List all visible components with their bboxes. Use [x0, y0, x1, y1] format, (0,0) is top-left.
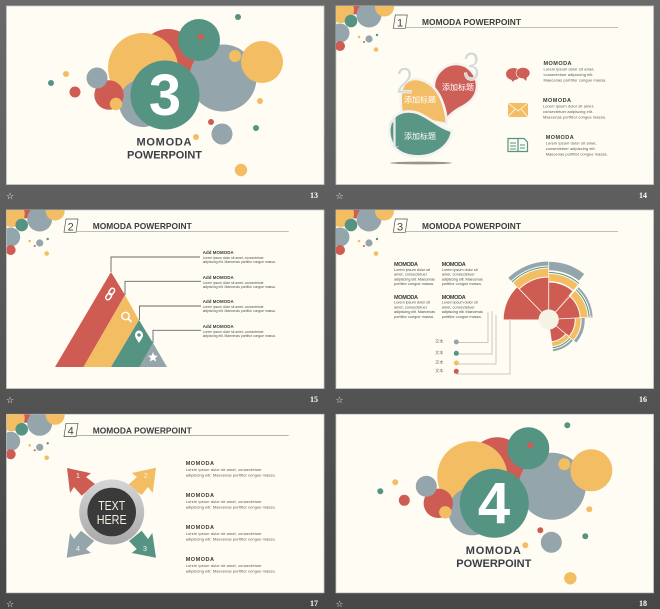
bubble cluster: [377, 422, 612, 584]
legend labels: 文本: [435, 338, 443, 344]
footer 15: 15: [310, 395, 318, 404]
heading: MOMODA POWERPOINT: [422, 221, 522, 231]
label 3: Lorem ipsum dolor sit amet, consectetuer: [203, 305, 265, 309]
legend dot red: [454, 369, 459, 374]
heading: 3: [397, 221, 403, 233]
icon: link: [105, 287, 116, 301]
arrow numbers: 2: [144, 471, 148, 480]
corner bubbles: [6, 414, 65, 460]
section title: POWERPOINT: [127, 150, 202, 162]
corner bubbles: [6, 210, 65, 256]
drop: yellow: [401, 79, 447, 124]
drop labels: 添加标题: [442, 82, 474, 92]
legend labels: 文本: [435, 358, 443, 364]
section title: POWERPOINT: [456, 558, 532, 570]
text block 3: Lorem ipsum dolor sit amet, consectetuer: [186, 531, 262, 536]
slide 16: radial chart: [336, 210, 654, 389]
text block 2: MOMODA: [543, 98, 571, 104]
text block 4: adipiscing elit. Maecenas porttitor congue massa.: [186, 569, 276, 574]
text block bottom right: adipiscing elit. Maecenas: [442, 309, 483, 314]
text block 4: MOMODA: [186, 557, 214, 563]
text block 4: Lorem ipsum dolor sit amet, consectetuer: [186, 563, 262, 568]
footer 17: 17: [310, 599, 318, 608]
text block top right: Lorem ipsum dolor sit: [442, 267, 479, 272]
numeral 2: 2: [396, 62, 413, 102]
text block 3: adipiscing elit. Maecenas porttitor congue massa.: [186, 537, 276, 542]
label 4: [203, 324, 276, 338]
pyramid chart: [55, 272, 167, 367]
icon: map pin: [135, 330, 143, 343]
label 1: Lorem ipsum dolor sit amet, consectetuer: [203, 256, 265, 260]
leader lines: [111, 257, 201, 343]
icon: envelope: [508, 103, 528, 117]
text block 3: Maecenas porttitor congue massa.: [546, 151, 608, 156]
text block bottom left: MOMODA: [394, 295, 418, 301]
drop: red: [434, 64, 477, 122]
text block 4: [186, 557, 276, 574]
slide 14: teardrops: [328, 0, 654, 184]
text block 3: Lorem ipsum dolor sit amet,: [546, 140, 597, 145]
label 2: Add MOMODA: [203, 275, 235, 280]
label 4: adipiscing elit. Maecenas porttitor congue massa.: [203, 334, 276, 338]
text block top right: [442, 262, 483, 286]
text block 3: [546, 135, 608, 156]
legend dot gray: [454, 340, 459, 344]
text block top left: Lorem ipsum dolor sit: [394, 267, 431, 272]
section title: [127, 137, 202, 162]
bubble cluster: [48, 14, 283, 176]
label 1: Add MOMODA: [203, 250, 235, 255]
section title: [456, 545, 532, 570]
heading: [393, 219, 618, 233]
label 4: Lorem ipsum dolor sit amet, consectetuer: [203, 330, 265, 334]
text block 2: Maecenas porttitor congue massa.: [543, 114, 606, 119]
arrow numbers: 3: [143, 544, 147, 553]
text block 3: MOMODA: [546, 135, 574, 141]
slide 13: section 3: [6, 6, 324, 184]
section number: 3: [149, 63, 181, 128]
legend dot teal: [454, 351, 459, 356]
footer 14: 14: [639, 191, 647, 200]
label 2: [203, 275, 276, 289]
text block 1: consectetuer adipiscing elit.: [544, 72, 594, 77]
drop labels: 添加标题: [404, 94, 436, 104]
text block 2: adipiscing elit. Maecenas porttitor congue massa.: [186, 505, 276, 510]
text block 3: MOMODA: [186, 525, 214, 531]
arrow 4: [67, 531, 94, 558]
text block 2: [543, 98, 606, 119]
text block top left: porttitor congue massa.: [394, 281, 434, 286]
label 3: adipiscing elit. Maecenas porttitor congue massa.: [203, 309, 276, 313]
footer 14: [336, 191, 647, 202]
text block 2: MOMODA: [186, 493, 214, 499]
footer 15: [6, 395, 318, 406]
icon: star: [148, 352, 158, 362]
slide 17: arrows: [0, 405, 324, 593]
text block bottom right: amet, consectetuer: [442, 304, 475, 309]
legend: [435, 311, 510, 374]
heading: 1: [397, 17, 403, 29]
central badge: TEXT: [98, 498, 125, 513]
arrow 2: [128, 468, 156, 495]
drop labels: 添加标题: [404, 131, 436, 141]
footer 14: ☆: [336, 192, 344, 202]
legend labels: 文本: [435, 349, 443, 355]
label 4: Add MOMODA: [203, 324, 235, 329]
text block 2: consectetuer adipiscing elit.: [543, 109, 593, 114]
label 3: Add MOMODA: [203, 299, 235, 304]
heading: MOMODA POWERPOINT: [93, 425, 193, 435]
icon: document: [508, 138, 528, 152]
label 1: [203, 250, 276, 264]
section title: MOMODA: [466, 545, 521, 557]
text block top right: adipiscing elit. Maecenas: [442, 276, 483, 281]
arrow numbers: 1: [76, 471, 80, 480]
drop: teal: [389, 111, 452, 156]
corner bubbles: [336, 6, 394, 52]
arrow 1: [67, 468, 95, 496]
legend dot yellow: [454, 360, 459, 366]
footer 13: 13: [310, 191, 318, 200]
icon: search: [122, 312, 132, 322]
footer 13: [6, 191, 318, 202]
icon: speech bubbles: [506, 67, 530, 82]
text block 1: [544, 61, 606, 82]
text block 2: Lorem ipsum dolor sit amet,: [543, 103, 594, 108]
legend labels: [435, 338, 443, 373]
text block 2: [186, 493, 276, 510]
drop labels: [404, 82, 474, 141]
text block 1: Lorem ipsum dolor sit amet,: [544, 66, 594, 71]
label 2: adipiscing elit. Maecenas porttitor congue massa.: [203, 285, 276, 289]
text block bottom left: [394, 295, 435, 319]
section number: 4: [478, 471, 510, 536]
label 3: [203, 299, 276, 313]
heading: 4: [68, 426, 74, 438]
footer 15: ☆: [6, 396, 14, 406]
label 1: adipiscing elit. Maecenas porttitor congue massa.: [203, 260, 276, 264]
numeral 1: 1: [387, 108, 401, 160]
heading: 2: [68, 221, 74, 233]
radial chart: [470, 240, 628, 399]
slide 15: pyramid: [0, 201, 324, 388]
heading: MOMODA POWERPOINT: [93, 221, 193, 231]
text block 1: Lorem ipsum dolor sit amet, consectetuer: [186, 467, 262, 472]
text block top left: adipiscing elit. Maecenas: [394, 276, 435, 281]
legend labels: 文本: [435, 367, 443, 373]
heading: [64, 423, 289, 438]
heading: MOMODA POWERPOINT: [422, 17, 522, 27]
text block bottom left: amet, consectetuer: [394, 304, 428, 309]
text block 1: adipiscing elit. Maecenas porttitor congue massa.: [186, 473, 276, 478]
text block 1: MOMODA: [186, 461, 214, 467]
text block bottom left: porttitor congue massa.: [394, 314, 434, 319]
text block 2: Lorem ipsum dolor sit amet, consectetuer: [186, 499, 262, 504]
numeral 3: 3: [463, 45, 480, 89]
slide 18: section 4: [336, 414, 654, 593]
arrow 3: [129, 531, 156, 558]
footer 13: ☆: [6, 192, 14, 202]
footer 17: [6, 599, 318, 609]
footer 18: 18: [639, 599, 647, 608]
text block 3: [186, 525, 276, 542]
corner bubbles: [336, 210, 394, 256]
text block top left: [394, 262, 435, 286]
text block 1: [186, 461, 276, 478]
footer 16: ☆: [336, 396, 344, 406]
heading: [64, 219, 289, 233]
text block bottom right: MOMODA: [442, 295, 466, 301]
text block 1: Maecenas porttitor congue massa.: [544, 77, 606, 82]
text block top right: porttitor congue massa.: [442, 281, 482, 286]
section title: MOMODA: [136, 137, 192, 149]
text block top left: MOMODA: [394, 262, 418, 268]
text block 3: consectetuer adipiscing elit.: [546, 146, 596, 151]
central badge: HERE: [97, 512, 127, 527]
text block bottom left: adipiscing elit. Maecenas: [394, 309, 435, 314]
teardrop diagram: [387, 45, 480, 164]
arrow numbers: [76, 471, 148, 553]
text block top right: amet, consectetuer: [442, 272, 475, 276]
heading: [393, 15, 618, 29]
central badge: [79, 480, 144, 544]
footer 18: [336, 599, 647, 609]
footer 16: [336, 395, 647, 406]
text block 1: MOMODA: [544, 61, 572, 67]
text block bottom right: porttitor congue massa.: [442, 314, 482, 319]
footer 16: 16: [639, 395, 647, 404]
text block top right: MOMODA: [442, 262, 466, 268]
text block top left: amet, consectetuer: [394, 272, 428, 276]
text block bottom right: Lorem ipsum dolor sit: [442, 300, 479, 305]
label 2: Lorem ipsum dolor sit amet, consectetuer: [203, 281, 265, 285]
text block bottom left: Lorem ipsum dolor sit: [394, 300, 431, 305]
arrow numbers: 4: [76, 544, 80, 553]
text block bottom right: [442, 295, 483, 319]
